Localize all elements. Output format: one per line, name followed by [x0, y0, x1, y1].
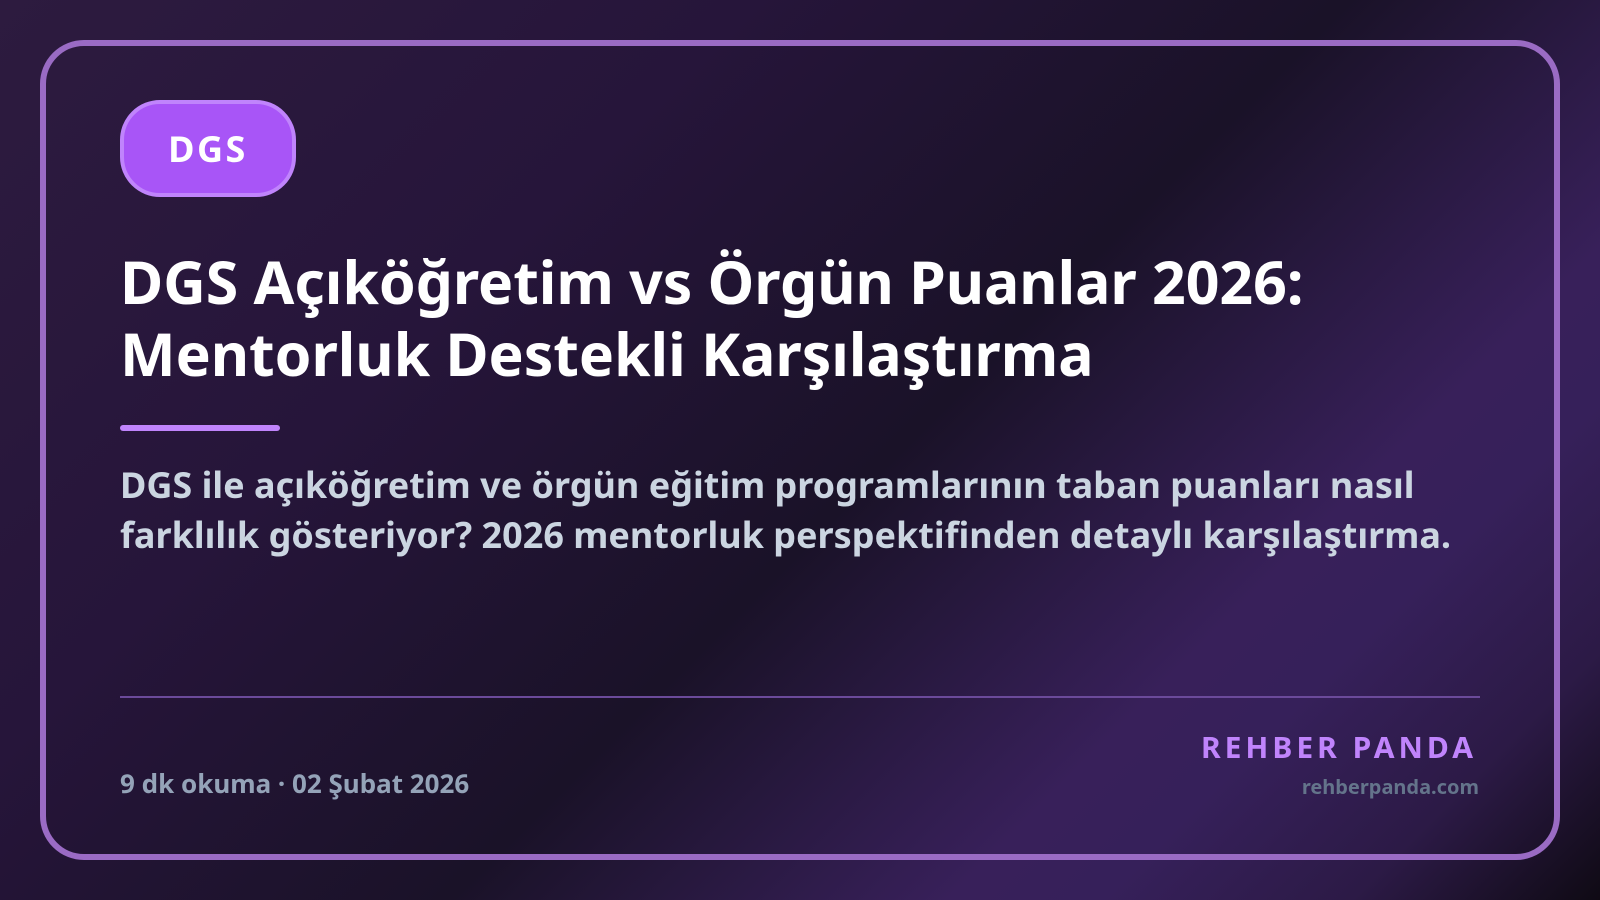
badge: DGS: DGS	[168, 124, 248, 173]
badge: DGS	[120, 100, 296, 197]
title: DGS Açıköğretim vs Örgün Puanlar 2026:	[120, 242, 1303, 322]
title	[120, 242, 1303, 394]
website: rehberpanda.com	[1302, 773, 1479, 800]
reading time and date: 9 dk okuma · 02 Şubat 2026	[120, 765, 469, 801]
subtitle: farklılık gösteriyor? 2026 mentorluk perspektifinden detaylı karşılaştırma.	[120, 510, 1451, 559]
subtitle: DGS ile açıköğretim ve örgün eğitim programlarının taban puanları nasıl	[120, 460, 1414, 509]
subtitle	[120, 460, 1451, 559]
brand name: REHBER PANDA	[1201, 726, 1477, 767]
footer divider	[120, 696, 1480, 698]
title: Mentorluk Destekli Karşılaştırma	[120, 314, 1094, 394]
accent line	[120, 425, 280, 431]
